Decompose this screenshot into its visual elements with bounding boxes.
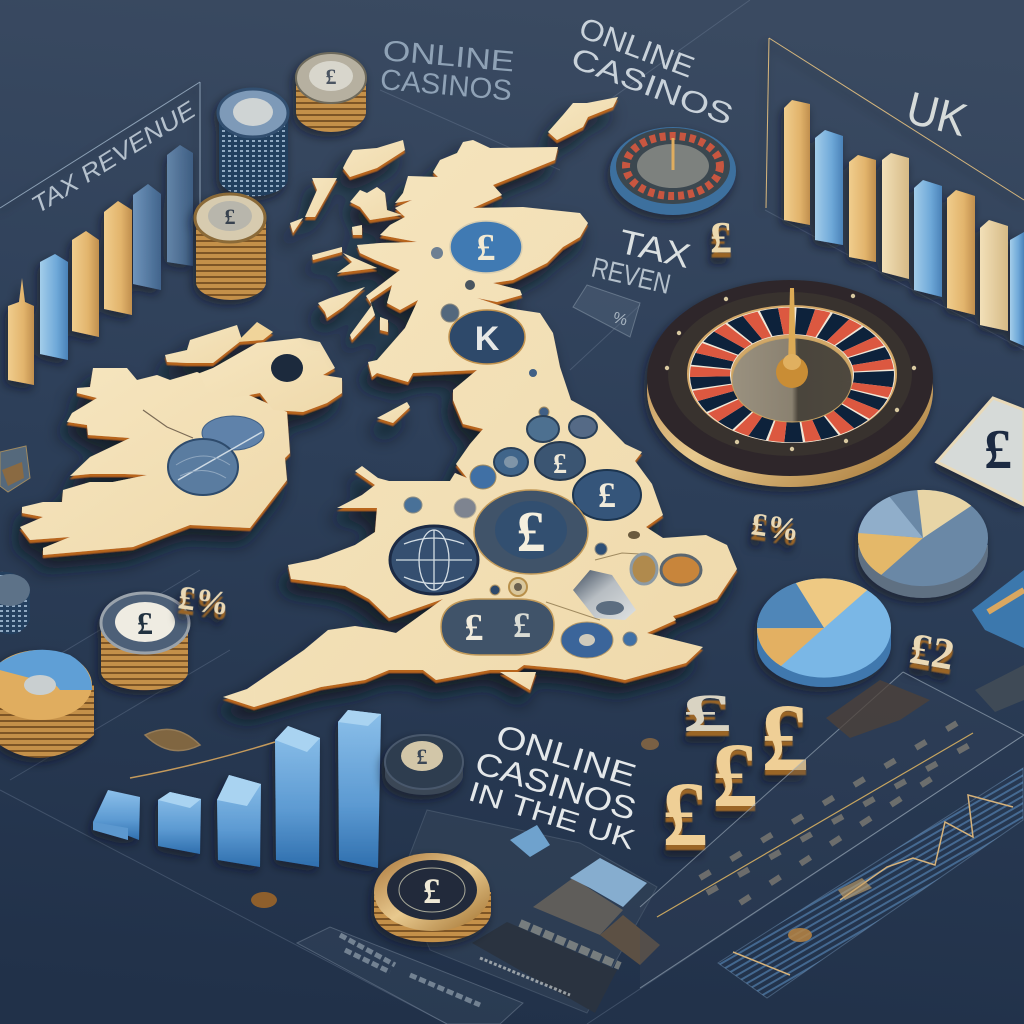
icon: gold pound symbols: £ <box>761 684 809 791</box>
map: Northern Ireland <box>200 338 342 412</box>
icon: amber coins <box>631 554 701 585</box>
icon: card stack right <box>972 570 1024 648</box>
chart: line panel bottom right <box>718 768 1023 998</box>
icon: percent and pound labels <box>176 213 958 679</box>
icon: large pound coin: £ <box>516 499 546 564</box>
icon: small Scotland dots <box>431 247 537 377</box>
map: north Irish lobes <box>165 325 242 363</box>
icon: large gold coin bottom: £ <box>423 871 441 911</box>
panel: small glass note: % <box>611 309 629 330</box>
map: small triangle island <box>237 322 273 342</box>
icon: top coin stack <box>296 53 366 132</box>
panel: small glass note <box>573 285 640 337</box>
icon: gold pound symbols: £ <box>712 724 758 826</box>
map: Ireland <box>20 322 342 555</box>
icon: globe <box>390 526 478 594</box>
heading: tax revenue centre <box>589 223 694 300</box>
icon: south coin <box>561 622 613 658</box>
heading: UK: UK <box>902 81 973 146</box>
icon: percent and pound labels: £ <box>710 213 732 262</box>
crack line <box>143 410 193 438</box>
icon: small dark coin: £ <box>416 744 428 769</box>
icon: glass cube edge <box>0 446 30 492</box>
map: Great Britain <box>223 97 737 707</box>
icon: gold coin stack left: £ <box>224 204 236 229</box>
map: Scottish islands <box>290 97 618 690</box>
icon: gold coin stack left <box>195 194 266 300</box>
panel: photo inset bottom <box>400 810 660 1013</box>
icon: pound coin stack lower left <box>101 593 189 690</box>
heading: online casinos in the UK <box>463 714 658 856</box>
icon: double pound coin: £ <box>513 605 531 645</box>
icon: percent and pound labels: £% <box>749 505 802 548</box>
icon: large roulette wheel <box>647 280 933 487</box>
icon: metallic inset with lines <box>546 553 640 620</box>
icon: K coin: K <box>475 320 500 358</box>
icon: coloured chip stack <box>0 650 94 758</box>
icon: top coin stack: £ <box>326 64 336 89</box>
icon: Ireland coin cluster <box>168 416 264 495</box>
icon: large pound coin <box>474 490 588 574</box>
icon: gold pound symbols: £ <box>682 683 732 743</box>
heading: online casinos in the UK: CASINOS <box>471 744 640 827</box>
icon: double pound coin: £ <box>464 607 484 649</box>
panel: data table <box>640 665 1024 988</box>
heading: online casinos right: CASINOS <box>567 42 737 132</box>
heading: online casinos right: ONLINE <box>575 12 699 85</box>
icon: pound coin Scotland: £ <box>476 227 496 269</box>
icon: K coin <box>449 310 525 364</box>
icon: pound coin right: £ <box>598 475 616 515</box>
icon: percent and pound labels: £2 <box>906 624 958 679</box>
heading: online casinos left: CASINOS <box>379 64 513 107</box>
icon: coin pound small: £ <box>553 449 567 480</box>
icon: pound coin right <box>573 470 641 520</box>
bar chart: bottom blue bars <box>93 710 381 868</box>
icon: percent and pound labels: £% <box>176 579 232 623</box>
heading: tax revenue centre: TAX <box>615 223 694 276</box>
heading: online casinos right <box>564 12 748 132</box>
icon: gold pound symbols: £ <box>662 763 708 865</box>
heading: online casinos in the UK: IN THE UK <box>465 776 639 856</box>
heading: online casinos left <box>379 35 516 107</box>
roulette studs <box>665 294 916 451</box>
pie chart: upper <box>858 504 988 598</box>
icon: blue coin stack <box>218 89 288 196</box>
bar chart: top right <box>766 38 1024 346</box>
icon: pound coin Scotland <box>450 221 522 273</box>
icon: pound coin stack lower left: £ <box>137 605 153 641</box>
icon: gold scribble <box>130 729 659 908</box>
heading: tax revenue centre: REVEN <box>589 252 674 300</box>
panel: caption strip bottom <box>297 927 523 1024</box>
icon: small England coins <box>404 407 640 646</box>
icon: bill card right: £ <box>984 419 1012 481</box>
bar chart: left tax revenue <box>0 82 200 385</box>
icon: dark chip stack edge <box>0 572 30 634</box>
icon: large gold coin bottom <box>374 853 491 942</box>
icon: coin pound small <box>535 442 585 480</box>
heading: online casinos left: ONLINE <box>381 35 516 78</box>
icon: double pound coin <box>441 599 554 655</box>
icon: gold pound symbols <box>662 683 809 865</box>
pie chart: lower <box>757 593 891 687</box>
icon: small roulette wheel <box>610 127 736 215</box>
icon: bill card right <box>937 398 1024 505</box>
icon: small dark coin <box>385 735 463 795</box>
icon: Ireland marker <box>271 354 303 382</box>
heading: online casinos in the UK: ONLINE <box>492 717 640 794</box>
heading: tax revenue left: TAX REVENUE <box>27 96 202 219</box>
